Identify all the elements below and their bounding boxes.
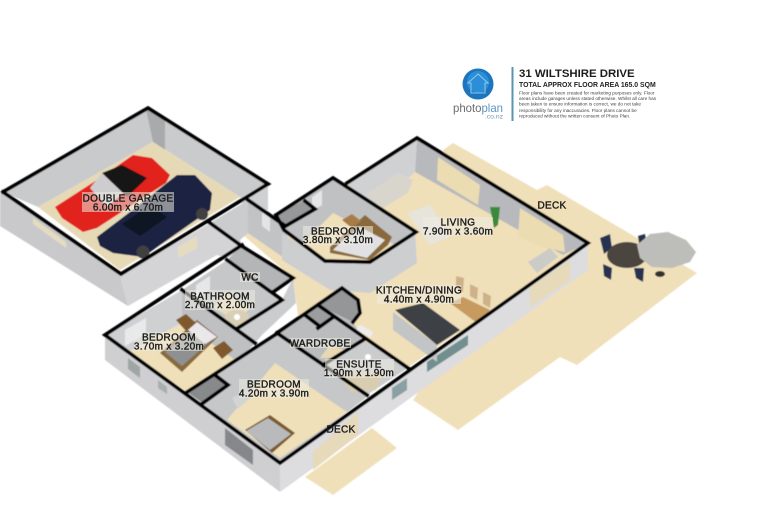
floor plan xyxy=(0,108,697,495)
panel: double garage xyxy=(3,108,268,270)
label: bathroom xyxy=(185,290,255,311)
deck: main rear and side xyxy=(413,143,697,430)
panel: upper bedroom xyxy=(276,178,417,293)
divider bar xyxy=(512,67,514,121)
label: upper bedroom: BEDROOM xyxy=(311,226,365,238)
disclaimer: responsibility for any inaccuracies. Floor plans cannot be xyxy=(519,108,637,113)
disclaimer: Floor plans have been created for marketing purposes only. Floor xyxy=(519,90,655,96)
label: left bedroom: 3.70m x 3.20m xyxy=(134,342,204,352)
title: 31 WILTSHIRE DRIVE xyxy=(519,68,635,80)
deck: lower front xyxy=(305,428,397,495)
header text xyxy=(519,68,657,118)
panel: ensuite xyxy=(323,324,408,395)
main open floor xyxy=(243,172,588,368)
disclaimer: areas include garages unless stated otherwise. Whilst all care has xyxy=(519,96,657,101)
label: double garage xyxy=(82,192,174,214)
label: double garage: 6.00m x 6.70m xyxy=(93,202,163,214)
kitchen island xyxy=(393,312,437,362)
dining chairs xyxy=(456,276,491,308)
label: ensuite xyxy=(324,359,394,379)
label: living xyxy=(423,217,493,238)
label: ensuite: 1.90m x 1.90m xyxy=(324,368,394,379)
panel: wardrobe and closets xyxy=(277,288,363,365)
label: ensuite: ENSUITE xyxy=(336,360,382,370)
walls: black top outlines xyxy=(3,108,588,463)
label: kitchen/dining: 4.40m x 4.90m xyxy=(384,294,454,306)
label: lower bedroom: 4.20m x 3.90m xyxy=(239,388,309,400)
panel: bathroom xyxy=(182,260,282,328)
room labels xyxy=(82,192,567,436)
label: deck lower: DECK xyxy=(326,424,356,436)
panel: living room walls and furniture xyxy=(347,138,588,362)
label: living: LIVING xyxy=(441,218,475,228)
label: bathroom: BATHROOM xyxy=(190,292,250,302)
icon: navy car xyxy=(97,175,212,257)
hallway walls xyxy=(210,200,296,343)
label: deck rear: DECK xyxy=(537,200,567,212)
label: kitchen/dining xyxy=(376,285,462,306)
icon: plant xyxy=(490,207,500,228)
logo text: photoplan xyxy=(453,102,503,115)
label: kitchen/dining: KITCHEN/DINING xyxy=(376,286,462,296)
nightstands xyxy=(176,314,196,331)
armchair xyxy=(528,248,558,273)
label: lower bedroom: BEDROOM xyxy=(247,380,301,390)
label: wc: WC xyxy=(241,272,259,284)
rug xyxy=(407,205,450,245)
label: left bedroom xyxy=(134,332,204,352)
icon: red car xyxy=(55,155,170,232)
disclaimer: reproduced without the written consent of Photo Plan. xyxy=(519,114,630,118)
garage exterior walls xyxy=(0,192,243,306)
panel: wc xyxy=(227,245,293,292)
panel: left bedroom xyxy=(105,290,255,392)
icon: house in blue circle xyxy=(462,68,494,100)
label: lower bedroom xyxy=(239,379,309,400)
sofa xyxy=(365,173,413,208)
label: upper bedroom: 3.80m x 3.10m xyxy=(303,235,373,246)
panel: lower bedroom xyxy=(187,335,367,463)
label: bathroom: 2.70m x 2.00m xyxy=(185,300,255,311)
desk xyxy=(232,390,251,409)
dining table xyxy=(450,297,490,323)
floor area: TOTAL APPROX FLOOR AREA 165.0 SQM xyxy=(519,82,656,89)
disclaimer xyxy=(519,90,657,118)
label: wardrobe: WARDROBE xyxy=(289,338,351,350)
label: upper bedroom xyxy=(303,226,373,246)
bed xyxy=(245,415,295,453)
disclaimer: been taken to ensure information is correct, we do not take xyxy=(519,102,641,106)
label: double garage: DOUBLE GARAGE xyxy=(83,194,173,204)
bed xyxy=(330,215,392,260)
label: left bedroom: BEDROOM xyxy=(142,332,196,344)
logo text: .co.nz xyxy=(485,114,504,120)
logo: photoplan xyxy=(453,68,504,120)
main house exterior walls xyxy=(105,243,588,492)
outdoor dining set xyxy=(600,232,696,282)
label: living: 7.90m x 3.60m xyxy=(423,226,493,238)
bed xyxy=(160,320,218,372)
nightstand xyxy=(342,214,361,228)
